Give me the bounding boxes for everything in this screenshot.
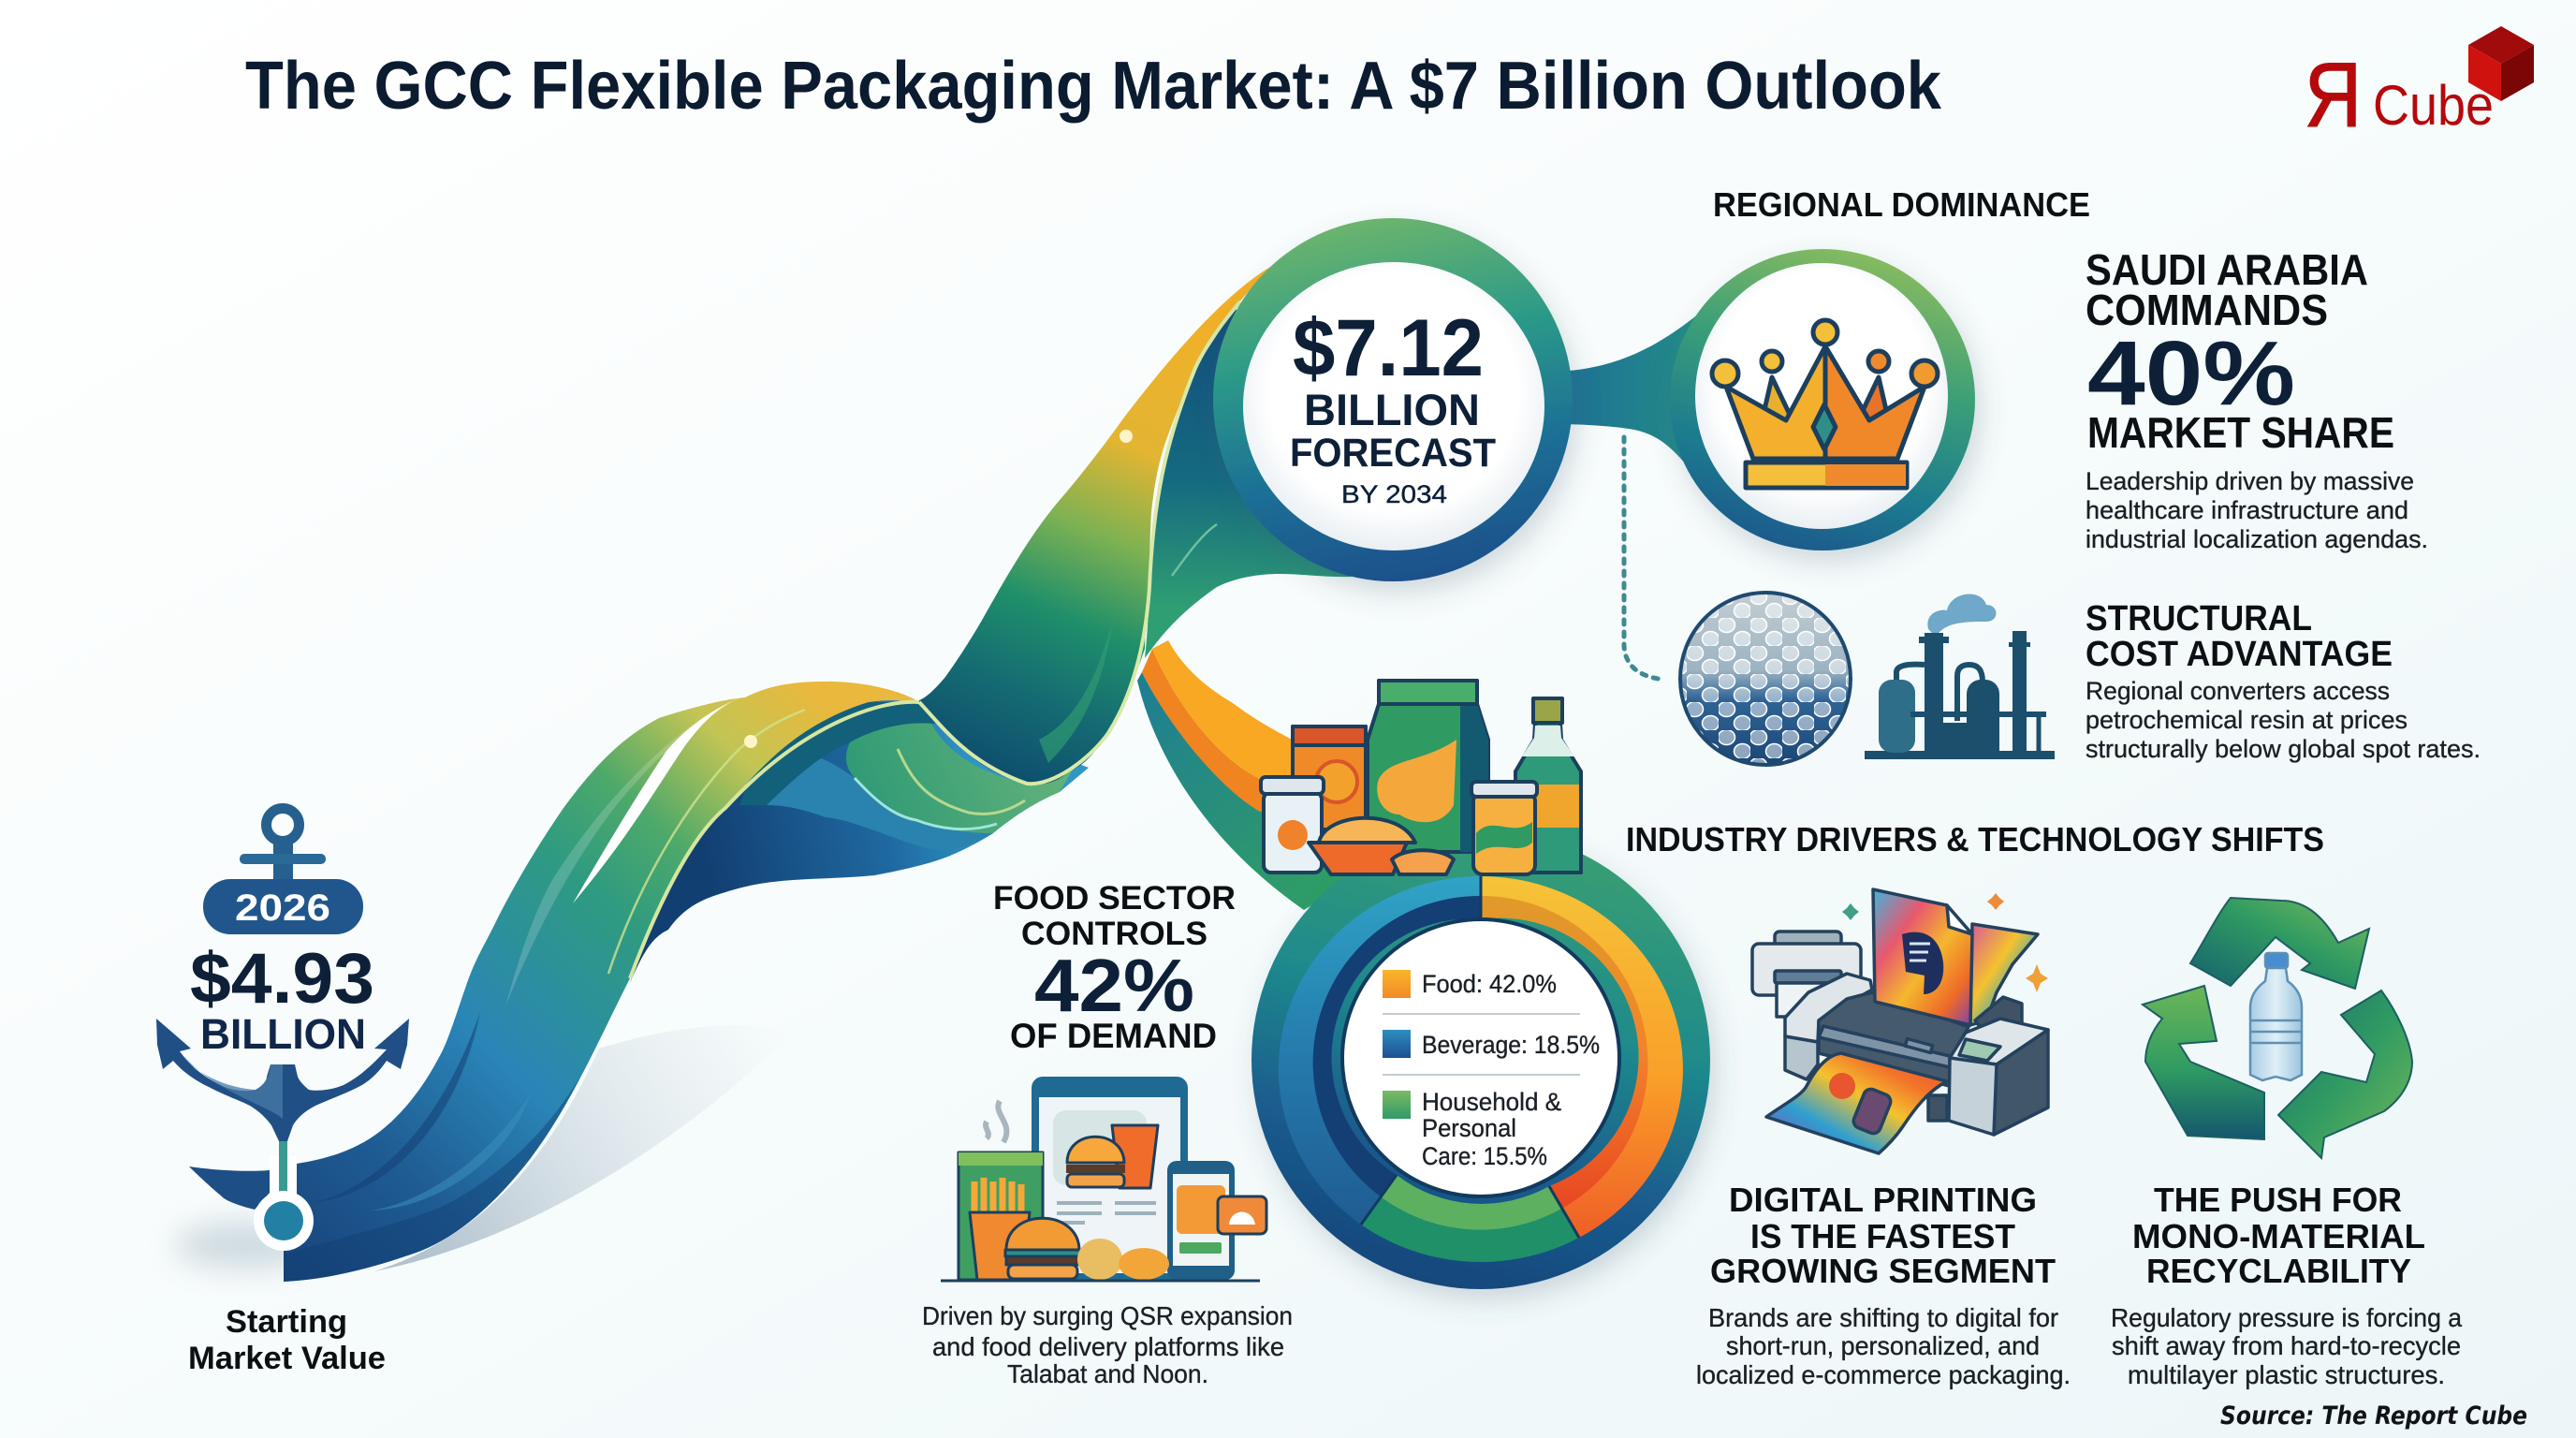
ribbon tail [189, 1167, 270, 1210]
legend: household and personal care: Care: 15.5% [1422, 1142, 1547, 1170]
legend: household and personal care: Household & [1422, 1088, 1561, 1116]
crown circle [1670, 249, 1975, 550]
text block: saudi arabia: MARKET SHARE [2087, 408, 2394, 457]
growth ribbon [189, 267, 1353, 1282]
legend: household and personal care [1383, 1088, 1561, 1170]
plastic bottle [2250, 953, 2302, 1080]
text block: digital printing: localized e-commerce packaging. [1696, 1360, 2071, 1389]
text block: recyclability: THE PUSH FOR [2154, 1181, 2402, 1219]
anchor stem and node [254, 1141, 314, 1251]
text block: food sector: CONTROLS [1021, 916, 1208, 952]
text block: saudi arabia: Leadership driven by massive [2086, 467, 2414, 495]
anchor arms [156, 1019, 409, 1141]
forecast circle [1213, 218, 1573, 581]
text block: digital printing: short-run, personalized, and [1726, 1331, 2040, 1360]
printer left housing [1785, 974, 1872, 1079]
printer right housing [1949, 1019, 2048, 1135]
text block: structural cost advantage: Regional converters access [2086, 677, 2390, 705]
source note: Source: The Report Cube [2220, 1401, 2527, 1431]
icon: recycling arrows with bottle [2143, 898, 2412, 1158]
text block: food sector description [922, 1301, 1293, 1388]
donut chart [1251, 830, 1710, 1289]
dotted connector to resin [1624, 437, 1665, 680]
burger [1005, 1218, 1080, 1279]
rear sheet [1970, 924, 2038, 1025]
text block: recyclability: shift away from hard-to-recycle [2112, 1331, 2461, 1360]
text block: structural cost advantage: COST ADVANTAGE [2086, 635, 2393, 674]
jar of preserves [1471, 782, 1537, 874]
title: The GCC Flexible Packaging Market: A $7 Billion Outlook [245, 49, 1942, 124]
text block: digital printing: GROWING SEGMENT [1710, 1252, 2056, 1290]
segment: household and personal care [1361, 1175, 1579, 1262]
forecast label: FORECAST [1290, 431, 1496, 476]
ribbon upper section [919, 267, 1270, 785]
icon: food delivery [941, 1077, 1266, 1281]
bottle [1515, 698, 1581, 873]
text block: food sector description: Driven by surging QSR expansion [922, 1301, 1293, 1330]
icon: digital printer [1752, 889, 2048, 1153]
text block: saudi arabia: COMMANDS [2086, 286, 2328, 334]
text block: food sector description: and food delivery platforms like [932, 1332, 1284, 1361]
icon: petrochemical plant [1865, 594, 2055, 759]
fries bag [959, 1152, 1043, 1280]
text block: digital printing: DIGITAL PRINTING [1729, 1181, 2037, 1219]
starting value [190, 939, 374, 1058]
ribbon underside [630, 700, 1089, 983]
badge: 2026 [203, 879, 363, 934]
starting label [188, 1304, 386, 1376]
chat bubble [1218, 1196, 1266, 1234]
heading: regional dominance: REGIONAL DOMINANCE [1713, 185, 2090, 224]
segment: food 42% [1481, 876, 1683, 1238]
text block: structural cost advantage: petrochemical resin at prices [2086, 706, 2408, 734]
text block: structural cost advantage [2086, 599, 2481, 763]
logo: RCube: Cube [2373, 74, 2494, 137]
tablet [1032, 1077, 1188, 1280]
ribbon ground shadow [175, 1025, 796, 1271]
icon: packaged food products [1261, 681, 1581, 874]
printed output sheet [1766, 1053, 1947, 1153]
badge: 2026: 2026 [235, 888, 330, 929]
starting value: BILLION [200, 1010, 366, 1058]
tray of food [1309, 818, 1454, 874]
legend: food: Food: 42.0% [1422, 970, 1557, 998]
starting label: Market Value [188, 1341, 386, 1376]
legend: household and personal care: Personal [1422, 1114, 1516, 1142]
text block: recyclability: Regulatory pressure is forcing a [2111, 1303, 2462, 1332]
text block: food sector: OF DEMAND [1010, 1017, 1217, 1055]
text block: saudi arabia: 40% [2087, 322, 2295, 424]
ribbon lower section and upper band [284, 682, 919, 1282]
pouch [1293, 726, 1366, 829]
text block: structural cost advantage: structurally below global spot rates. [2086, 735, 2481, 763]
recycle arrow left [2143, 986, 2264, 1139]
main poster [1873, 889, 1972, 1025]
text block: recyclability [2111, 1181, 2462, 1389]
text block: recyclability: multilayer plastic structures. [2128, 1360, 2445, 1389]
text block: digital printing [1696, 1181, 2071, 1389]
connector: orange and teal swoosh to donut [1137, 640, 1385, 910]
text block: saudi arabia: industrial localization agendas. [2086, 525, 2428, 553]
text block: recyclability: MONO-MATERIAL [2132, 1217, 2425, 1255]
starting label: Starting [226, 1304, 347, 1340]
starting value: $4.93 [190, 939, 374, 1019]
icon: anchor [156, 809, 409, 1251]
logo: RCube: Я [2305, 44, 2362, 146]
text block: food sector [993, 880, 1236, 1055]
forecast label: BY 2034 [1341, 480, 1447, 508]
text block: saudi arabia: healthcare infrastructure and [2086, 496, 2408, 524]
forecast label [1290, 385, 1496, 508]
sparkles [1842, 893, 2048, 992]
green bag [1368, 681, 1488, 852]
heading: industry drivers: INDUSTRY DRIVERS & TECHNOLOGY SHIFTS [1626, 820, 2324, 858]
text block: recyclability: RECYCLABILITY [2146, 1252, 2411, 1290]
jar with fruit [1261, 777, 1324, 873]
legend: beverage: Beverage: 18.5% [1422, 1031, 1600, 1059]
text block: digital printing: IS THE FASTEST [1750, 1217, 2015, 1255]
text block: saudi arabia [2086, 245, 2428, 553]
segment: beverage [1279, 876, 1481, 1225]
text block: food sector: 42% [1034, 944, 1194, 1027]
ribbon right panel into forecast circle [1145, 306, 1353, 658]
steam [986, 1101, 1006, 1142]
forecast value: $7.12 [1293, 303, 1484, 393]
text block: food sector description: Talabat and Noon. [1007, 1359, 1208, 1388]
phone [1167, 1161, 1235, 1280]
icon: resin pellets [1676, 590, 1858, 768]
text block: digital printing: Brands are shifting to digital for [1708, 1303, 2058, 1332]
icon: crown [1712, 320, 1938, 488]
forecast ring [1213, 218, 1573, 581]
recycle arrow right [2278, 990, 2412, 1158]
text block: structural cost advantage: STRUCTURAL [2086, 599, 2312, 638]
connector: forecast circle to crown circle [1554, 314, 1718, 496]
logo: RCube [2305, 26, 2534, 146]
forecast label: BILLION [1304, 385, 1480, 434]
printer centre [1819, 992, 2022, 1086]
nuggets [1077, 1239, 1169, 1280]
recycle arrow top [2190, 898, 2369, 989]
text block: saudi arabia: SAUDI ARABIA [2086, 245, 2368, 294]
text block: food sector: FOOD SECTOR [993, 880, 1236, 917]
back printer [1752, 932, 1861, 1017]
